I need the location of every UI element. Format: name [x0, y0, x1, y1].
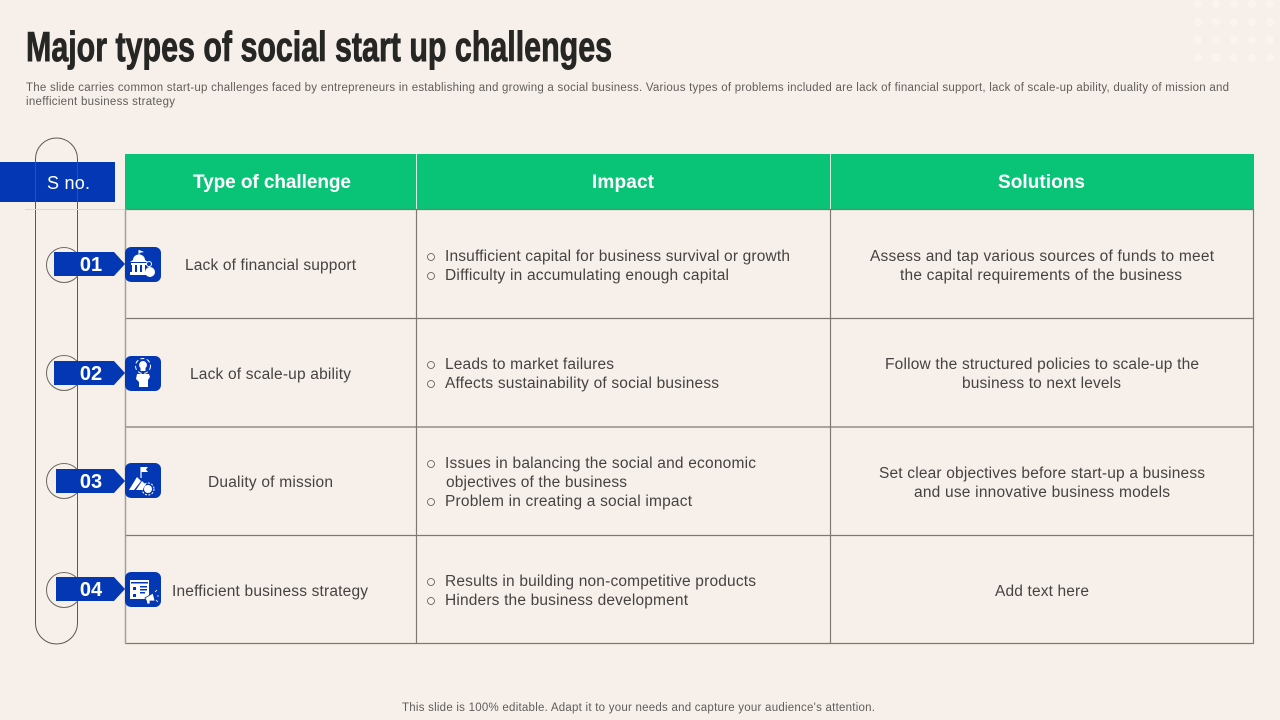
row 3: duality of mission: [208, 455, 1205, 510]
table: [125, 154, 1254, 644]
row 4: inefficient business strategy: Add text here: [995, 583, 1089, 600]
row 1: lack of financial support: Lack of financial support: [185, 257, 357, 274]
row 2: lack of scale-up ability: Affects sustainability of social business: [445, 375, 719, 392]
row 2: lack of scale-up ability: business to next levels: [962, 375, 1121, 392]
row 2: lack of scale-up ability: [190, 356, 1199, 392]
row 2: lack of scale-up ability: Leads to market failures: [445, 356, 614, 373]
row 3: duality of mission: objectives of the business: [446, 474, 627, 491]
marker 04: 04: [80, 579, 103, 601]
row 2: lack of scale-up ability: Lack of scale-up ability: [190, 366, 351, 383]
marker 04: [46, 572, 125, 608]
marker 03: [46, 464, 125, 498]
row 1: lack of financial support: [185, 248, 1215, 284]
marker 01: 01: [80, 254, 102, 276]
row 1: lack of financial support: Difficulty in accumulating enough capital: [445, 267, 729, 284]
table header row: [125, 154, 1254, 210]
row 3: duality of mission: Problem in creating a social impact: [445, 493, 693, 510]
table header row: Impact: [592, 172, 655, 193]
row 3: duality of mission: and use innovative business models: [914, 484, 1170, 501]
icon: bank with money: [125, 247, 161, 282]
row 2: lack of scale-up ability: Follow the structured policies to scale-up the: [885, 356, 1199, 373]
footer note: This slide is 100% editable. Adapt it to your needs and capture your audience's attention.: [402, 702, 875, 714]
row 4: inefficient business strategy: [172, 573, 1089, 609]
table header row: Solutions: [998, 172, 1085, 193]
marker 01: [46, 248, 125, 282]
row 1: lack of financial support: the capital requirements of the business: [900, 267, 1182, 284]
table header row: Type of challenge: [193, 172, 351, 193]
icon: head with lightbulb: [125, 356, 161, 391]
row 3: duality of mission: Set clear objectives before start-up a business: [879, 465, 1205, 482]
serial number rail: [36, 138, 78, 644]
row 1: lack of financial support: Insufficient capital for business survival or growth: [445, 248, 790, 265]
row 1: lack of financial support: Assess and tap various sources of funds to meet: [870, 248, 1215, 265]
marker 02: 02: [80, 363, 102, 385]
subtitle text block: [26, 82, 1229, 108]
icon: mountain with flag and target: [125, 463, 161, 498]
row 4: inefficient business strategy: Inefficient business strategy: [172, 583, 368, 600]
title: Major types of social start up challenges: [26, 23, 612, 70]
S no. header tab: [0, 162, 115, 202]
table grid: [125, 209, 1254, 644]
row 3: duality of mission: Duality of mission: [208, 474, 333, 491]
marker 02: [46, 356, 125, 390]
row 3: duality of mission: Issues in balancing the social and economic: [445, 455, 756, 472]
icon: strategy board with megaphone: [125, 572, 161, 607]
S no. header tab: S no.: [47, 173, 90, 193]
marker 03: 03: [80, 471, 102, 493]
row 4: inefficient business strategy: Results in building non-competitive products: [445, 573, 756, 590]
subtitle text block: The slide carries common start-up challenges faced by entrepreneurs in establishing and growing a social business. Various types of problems included are lack of financial support, lack of scale-up ability, duality of mission and: [26, 82, 1229, 94]
row 4: inefficient business strategy: Hinders the business development: [445, 592, 689, 609]
subtitle text block: inefficient business strategy: [26, 96, 175, 108]
